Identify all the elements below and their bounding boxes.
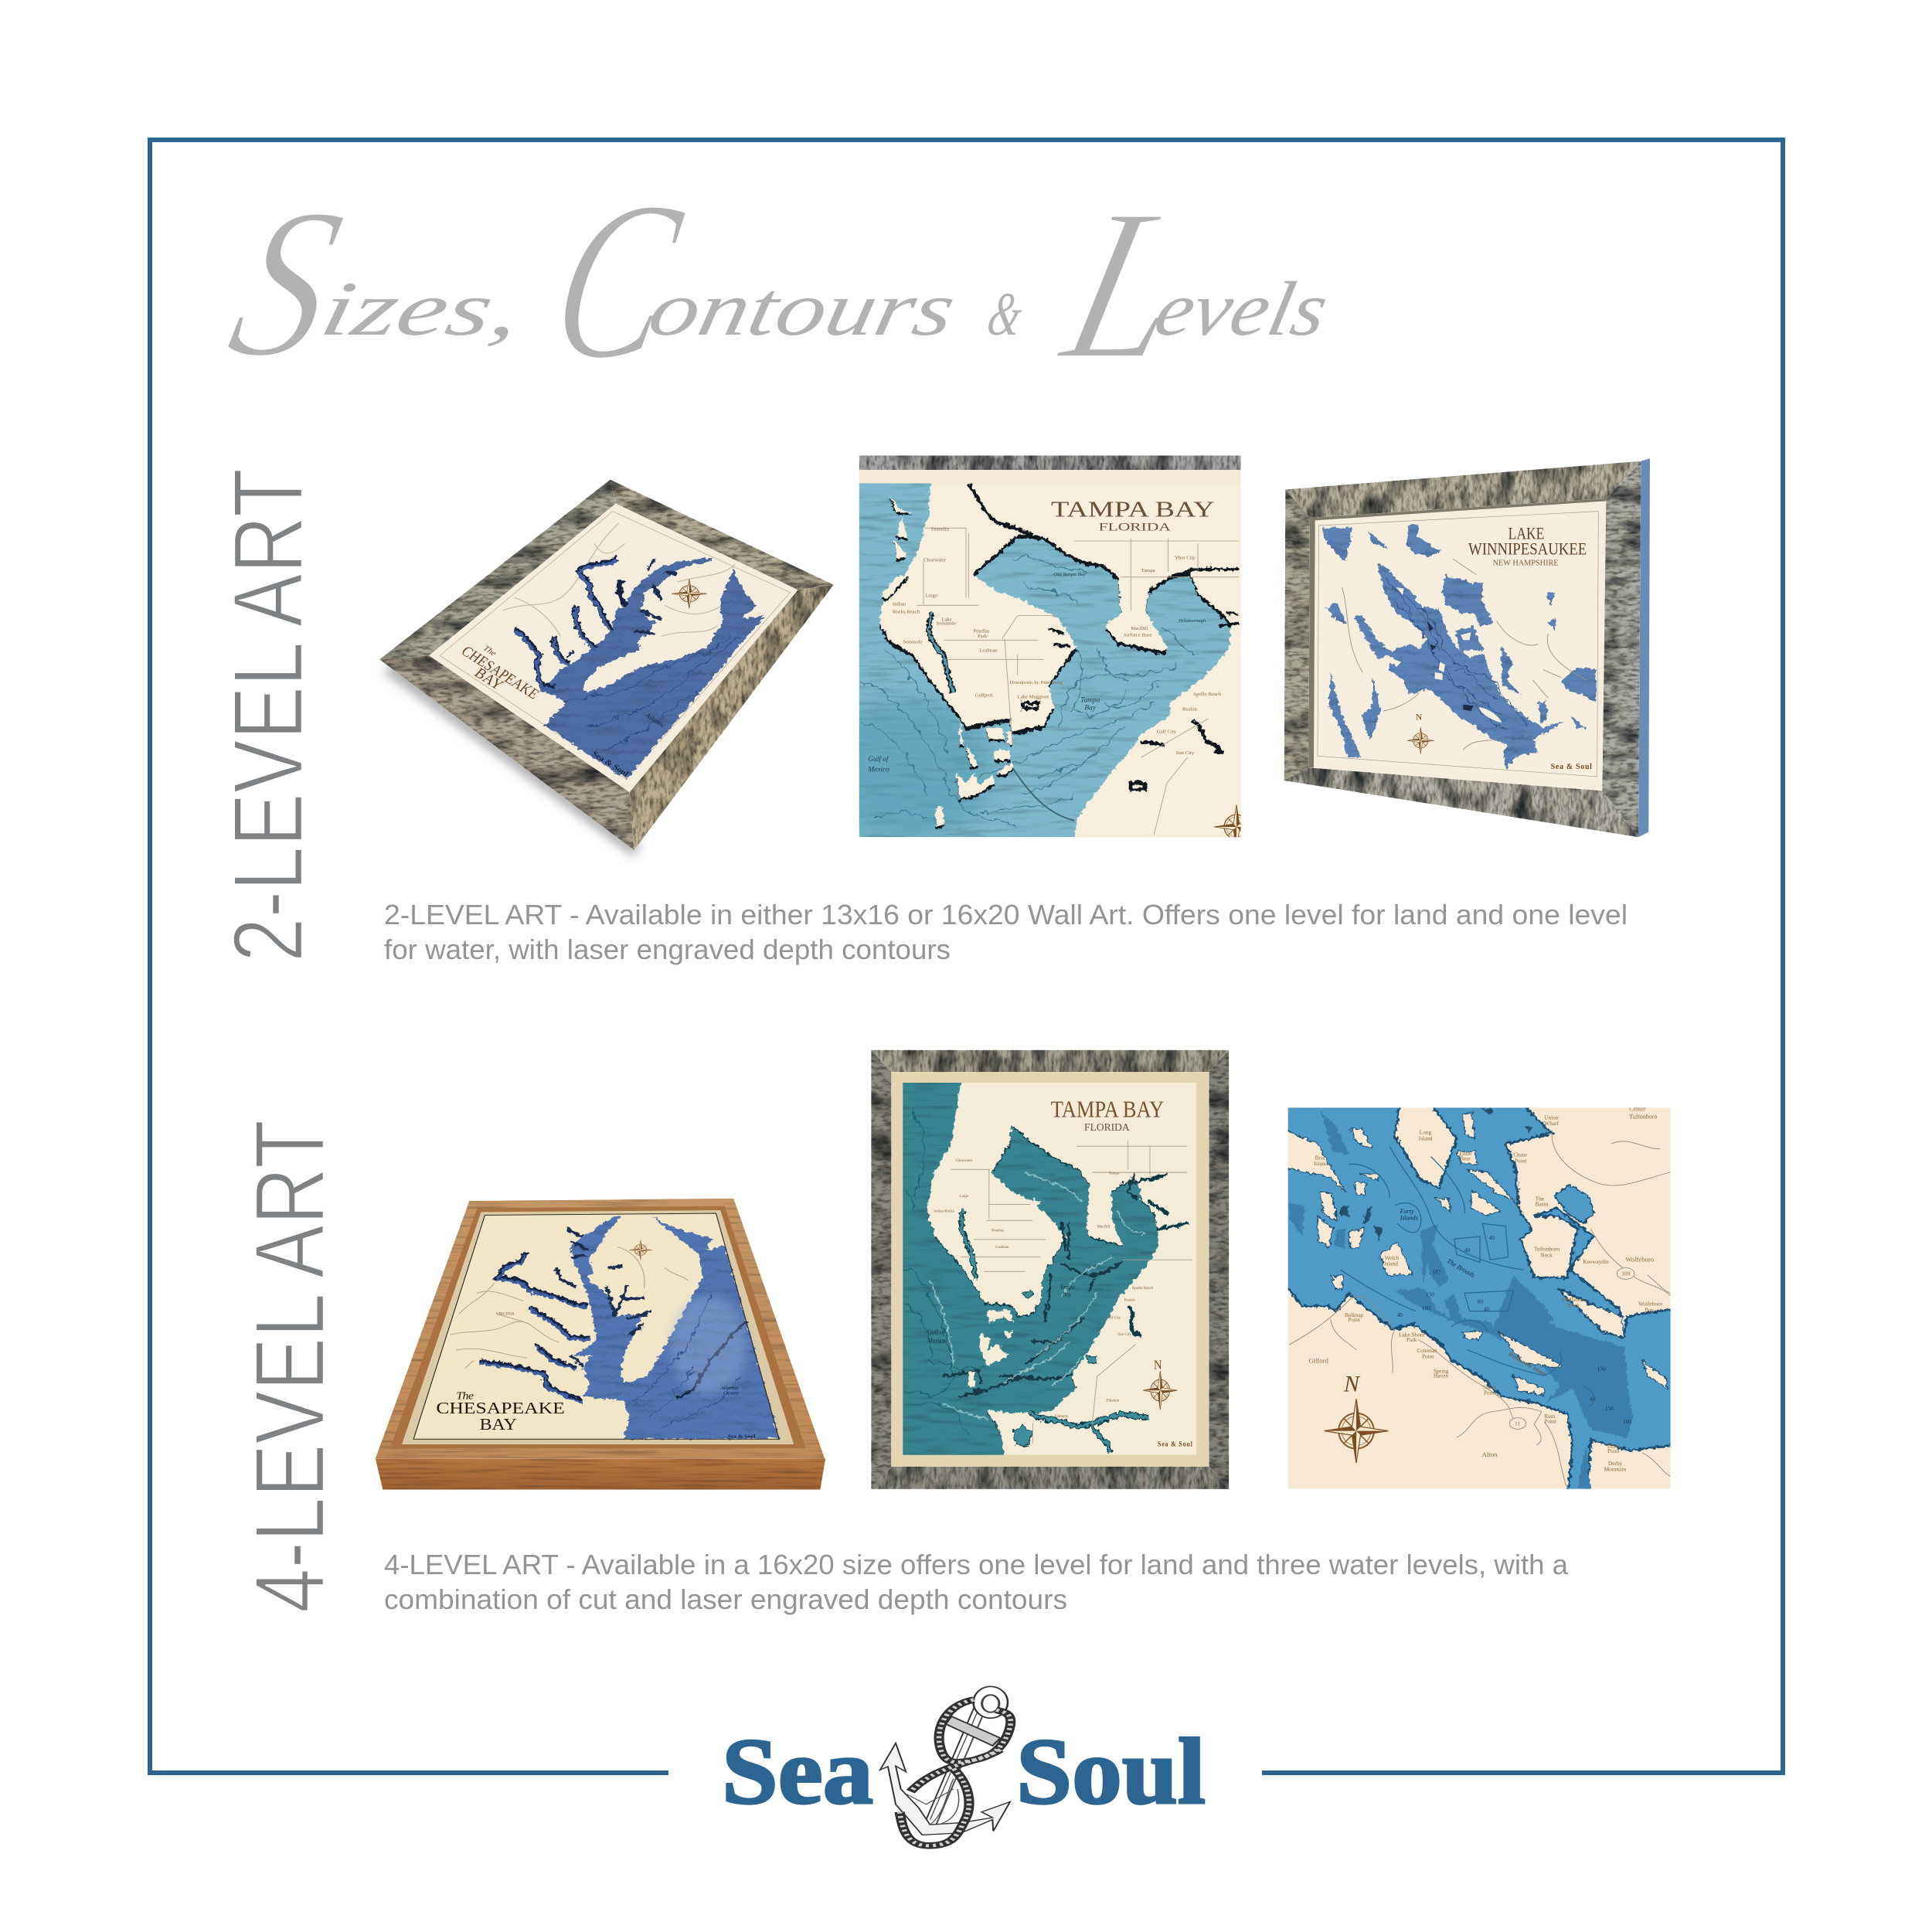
wooden box frame	[376, 1199, 825, 1489]
place labels	[1308, 1105, 1662, 1472]
place labels: Point	[1484, 1389, 1495, 1396]
map neatline	[440, 512, 791, 779]
map mat	[429, 504, 798, 792]
place labels: MacDill	[1131, 626, 1148, 631]
dark rocks	[1341, 1107, 1532, 1242]
place labels: Tuftonboro	[1629, 1113, 1657, 1120]
place labels: Pinellas	[973, 628, 990, 634]
land roads	[502, 523, 735, 636]
place labels: Gulfport	[975, 693, 993, 699]
wood frame	[379, 480, 834, 850]
place labels: Gulf City	[1157, 729, 1177, 734]
place labels: Lealman	[995, 1245, 1009, 1250]
place labels: 100	[1422, 1304, 1430, 1311]
map title: WINNIPESAUKEE	[1468, 539, 1587, 558]
place labels: Island	[1419, 1134, 1433, 1141]
map title	[1051, 502, 1214, 530]
compass rose	[629, 1240, 651, 1260]
place labels: 150	[1426, 1291, 1434, 1298]
place labels: Lake	[941, 617, 952, 622]
barn wood frame	[871, 1050, 1229, 1489]
place labels: Island	[1314, 1160, 1328, 1167]
place labels: 40	[1484, 1306, 1490, 1313]
deep water shading	[859, 694, 995, 838]
compass rose	[672, 579, 707, 608]
roads	[951, 1141, 1192, 1444]
place labels: Wolfeboro	[1563, 1296, 1587, 1303]
place labels: Long	[1420, 1128, 1431, 1135]
place labels: 40	[1590, 1396, 1595, 1403]
map title: NEW HAMPSHIRE	[1493, 560, 1559, 568]
place labels: Wolfeboro	[1638, 1300, 1662, 1307]
depth contours	[1341, 1146, 1594, 1406]
place labels: Haven	[1434, 1372, 1448, 1379]
offshore shelf	[676, 1321, 747, 1398]
place labels: Center	[1629, 1105, 1646, 1112]
place labels: Lealman	[979, 648, 998, 653]
place labels: Union	[1544, 1114, 1559, 1121]
panel: winnipesaukee 4-level detail	[1281, 1103, 1675, 1494]
place labels: Dunedin	[931, 527, 950, 532]
place labels: Gulf of	[927, 1328, 946, 1335]
depth contours	[859, 558, 1198, 827]
description: 4-level art: combination of cut and laser engraved depth contours	[384, 1583, 1067, 1615]
roads	[917, 528, 1239, 835]
light water centre	[671, 1296, 747, 1394]
place labels: Spring	[1434, 1368, 1449, 1375]
islands	[1391, 587, 1502, 723]
frame side edge	[1638, 458, 1650, 837]
state label: VIRGINIA	[496, 1313, 515, 1316]
water, rivers	[480, 1213, 782, 1443]
place labels: Tuftonboro	[1534, 1245, 1560, 1252]
place labels	[867, 527, 1222, 774]
wood board	[859, 456, 1068, 838]
title: &	[983, 281, 1028, 349]
map title: The	[456, 1390, 474, 1402]
title: ontours	[641, 266, 963, 352]
ocean label: Atlantic	[719, 1385, 740, 1391]
place labels: Pinellas	[992, 1228, 1004, 1233]
route markers	[1509, 1268, 1634, 1429]
place labels: The Broads	[1446, 1257, 1477, 1279]
place labels: Tampa	[1141, 568, 1155, 573]
section label: 2-level art: 2-LEVEL ART	[213, 468, 324, 962]
wood frame	[1284, 461, 1641, 837]
logo word: sea: Sea	[722, 1719, 873, 1824]
place labels: Tampa	[1109, 1172, 1120, 1176]
place labels: Tampa	[1080, 696, 1100, 704]
maker mark: Sea & Soul	[1551, 763, 1592, 771]
roads	[1289, 1131, 1671, 1489]
place labels: Chase	[1513, 1151, 1527, 1158]
place labels: Seminole	[903, 640, 923, 645]
place labels: Lake Maggiore	[1018, 694, 1049, 699]
N: N	[1343, 1372, 1361, 1397]
panel: tampa bay 2-level detail	[859, 455, 1241, 838]
N: N	[1154, 1359, 1162, 1372]
place labels: Belknap	[1345, 1311, 1364, 1318]
place labels: Black	[1607, 1442, 1621, 1449]
map title: FLORIDA	[1084, 1121, 1130, 1133]
maker mark: Sea & Soul	[728, 1434, 756, 1440]
maker mark: Sea & Soul	[1158, 1440, 1192, 1448]
place labels: 150	[1605, 1405, 1614, 1412]
board neatline	[413, 1213, 779, 1439]
deep areas	[1289, 1111, 1632, 1489]
map title: CHESAPEAKE	[436, 1400, 565, 1417]
place labels: Mountain	[1604, 1465, 1626, 1472]
place labels: Apollo Beach	[1192, 692, 1222, 697]
place labels: Point	[1515, 1158, 1526, 1165]
place labels: Rocks Beach	[893, 609, 920, 614]
highway	[1012, 767, 1074, 821]
place labels: Old Tampa Bay	[1053, 572, 1086, 577]
logo: sea and soul	[722, 1686, 1206, 1845]
place labels: Sun City	[1176, 750, 1195, 756]
place labels: Gulf of	[868, 755, 889, 764]
place labels: Gulf City	[1106, 1315, 1121, 1320]
map title: LAKE	[1509, 523, 1544, 543]
description: 4-level art	[384, 1549, 1569, 1615]
place labels: Largo	[925, 594, 938, 599]
place labels: Ybor City	[1175, 555, 1196, 560]
place labels: Largo	[960, 1194, 969, 1199]
place labels: Ruskin	[1182, 706, 1197, 712]
place labels: 40	[1489, 1234, 1495, 1241]
place labels: 11	[1515, 1420, 1520, 1427]
water and rivers	[513, 555, 765, 781]
place labels: 60	[1478, 1298, 1483, 1305]
place labels: 40	[1464, 1247, 1471, 1253]
place labels: Mexico	[927, 1336, 945, 1345]
place labels: Bay	[1063, 1291, 1072, 1298]
title: S	[211, 164, 361, 401]
title: L	[1043, 165, 1207, 404]
place labels: Bay	[1645, 1306, 1654, 1313]
place labels: Neck	[1540, 1252, 1553, 1259]
place labels: Wharf	[1544, 1120, 1560, 1127]
place labels: Smith	[1483, 1384, 1497, 1391]
place labels: Keewaydin	[1583, 1258, 1609, 1265]
place labels: Indian Rocks	[934, 1209, 954, 1214]
title: izes,	[314, 266, 529, 352]
place labels: Apollo Beach	[1132, 1286, 1154, 1291]
logo word: soul: Soul	[1016, 1719, 1206, 1824]
place labels: 100	[1623, 1418, 1631, 1425]
description: 2-level art	[384, 899, 1628, 965]
place labels: Welch	[1385, 1254, 1400, 1261]
panel: winnipesaukee 2-level framed map	[1284, 458, 1650, 837]
map neatline	[1318, 512, 1598, 777]
title	[211, 155, 1335, 406]
barrier islands	[881, 497, 1015, 829]
place labels: Bay	[1084, 704, 1097, 712]
place labels: Downtown St. Petersburg	[1010, 680, 1063, 685]
water inlets on land	[968, 485, 1033, 536]
place labels: Clearwater	[923, 558, 947, 563]
place labels: MacDill	[1097, 1225, 1111, 1230]
place labels: Bear	[1315, 1155, 1326, 1162]
place labels: Basin	[1536, 1201, 1549, 1208]
place labels: The	[1536, 1195, 1544, 1202]
place labels: Ruskin	[1124, 1298, 1135, 1303]
roads	[1342, 559, 1587, 750]
teal water	[891, 1072, 1209, 1467]
place labels: Wolfeboro	[1625, 1256, 1654, 1264]
depth contours	[566, 636, 741, 750]
place labels: 40	[1397, 1311, 1403, 1318]
place labels: Sun City	[1117, 1332, 1131, 1337]
N: N	[1416, 712, 1423, 723]
ocean label: Atlantic	[643, 711, 668, 729]
moose lake	[1555, 1185, 1594, 1223]
place labels: Island	[1384, 1260, 1398, 1267]
place labels: Point	[1544, 1418, 1556, 1425]
land	[927, 1073, 1206, 1464]
place labels: 109	[1621, 1270, 1631, 1277]
title: evels	[1148, 266, 1335, 352]
compass rose	[1407, 727, 1434, 754]
islands	[968, 1199, 1040, 1386]
compass rose	[1325, 1399, 1388, 1463]
map title: TAMPA BAY	[1051, 497, 1215, 522]
description: 4-level art: 4-LEVEL ART - Available in a 16x20 size offers one level for land and three water levels, with a	[384, 1549, 1569, 1580]
place labels: Rum	[1544, 1413, 1556, 1420]
place labels: Gilford	[1308, 1356, 1328, 1364]
place labels: Seminole	[937, 621, 956, 626]
map title: CHESAPEAKE	[457, 644, 543, 702]
map title: TAMPA BAY	[1051, 1097, 1164, 1123]
description: 2-level art: for water, with laser engraved depth contours	[384, 934, 951, 965]
place labels	[927, 1158, 1154, 1419]
place labels: Park	[1406, 1336, 1417, 1343]
compass rose	[1143, 1371, 1178, 1410]
ocean label 2: Ocean	[723, 1390, 739, 1396]
place labels: Islands	[1400, 1214, 1418, 1221]
place labels: Indian	[893, 601, 906, 607]
land with laser-cut shadow	[879, 474, 1252, 849]
place labels: 187	[1432, 1268, 1441, 1275]
place labels: Point	[1348, 1316, 1360, 1323]
land roads	[451, 1247, 688, 1368]
map mat strip	[859, 470, 972, 484]
icon: anchor with rope	[880, 1686, 1011, 1845]
maker mark: Sea & Soul	[590, 750, 631, 778]
birch board	[1288, 1107, 1671, 1489]
frame shadow	[383, 657, 640, 858]
map title: BAY	[480, 1415, 517, 1434]
map title: BAY	[471, 665, 507, 693]
panel: chesapeake 2-level framed map	[379, 480, 834, 858]
place labels: Ellenton	[1106, 1398, 1120, 1403]
contours	[629, 1294, 738, 1427]
lake water	[1314, 520, 1600, 778]
place labels: Point	[1607, 1447, 1619, 1454]
place labels: Coleman	[1417, 1347, 1437, 1354]
place labels: Rattlesnake Island	[1508, 1350, 1547, 1377]
place labels: Alton	[1482, 1451, 1498, 1458]
place labels: Palmetto	[1055, 1414, 1069, 1419]
panel: chesapeake 4-level framed map	[376, 1199, 825, 1489]
title: C	[534, 155, 701, 406]
map title: FLORIDA	[1099, 522, 1172, 534]
lake	[1281, 1103, 1675, 1494]
place labels: Derby	[1608, 1460, 1623, 1467]
compass rose (cropped)	[1214, 804, 1241, 838]
place labels: Airforce Base	[1123, 632, 1151, 638]
place labels: Hillsborough	[1178, 618, 1206, 624]
map title	[436, 1390, 565, 1434]
frame border with logo gap	[150, 140, 1783, 1773]
place labels: Forty	[1400, 1208, 1414, 1215]
birch map board	[413, 1213, 779, 1439]
eastern shore islands	[631, 1335, 660, 1375]
place labels: Lake Shore	[1399, 1331, 1425, 1338]
description: 2-level art: 2-LEVEL ART - Available in either 13x16 or 16x20 Wall Art. Offers one level for land and one level	[384, 899, 1628, 930]
place labels: Point	[1422, 1352, 1434, 1359]
place labels: 150	[1597, 1365, 1606, 1372]
place labels: Little	[1459, 1150, 1471, 1157]
section label: 4-level art: 4-LEVEL ART	[235, 1120, 345, 1613]
map mat	[1308, 498, 1606, 791]
panel: tampa bay 4-level framed map	[871, 1050, 1229, 1489]
deep channels	[943, 1172, 1138, 1396]
map title: The	[481, 644, 498, 658]
top frame edge	[859, 455, 1241, 470]
contours	[1383, 577, 1528, 732]
islands	[1281, 1113, 1668, 1395]
place labels: Clearwater	[956, 1158, 973, 1163]
place labels: Neck	[1567, 1302, 1580, 1309]
place labels: Tampa	[1060, 1283, 1075, 1291]
place labels: Bear	[1460, 1155, 1471, 1162]
rivers and creeks	[961, 1210, 1148, 1454]
water	[859, 483, 1241, 837]
depth contours in water	[904, 1111, 984, 1434]
dark rocks	[1427, 621, 1474, 711]
map mat ring	[891, 1072, 1209, 1467]
place labels: Mexico	[867, 766, 889, 774]
map title	[1468, 523, 1587, 568]
place labels: Park	[978, 634, 988, 639]
